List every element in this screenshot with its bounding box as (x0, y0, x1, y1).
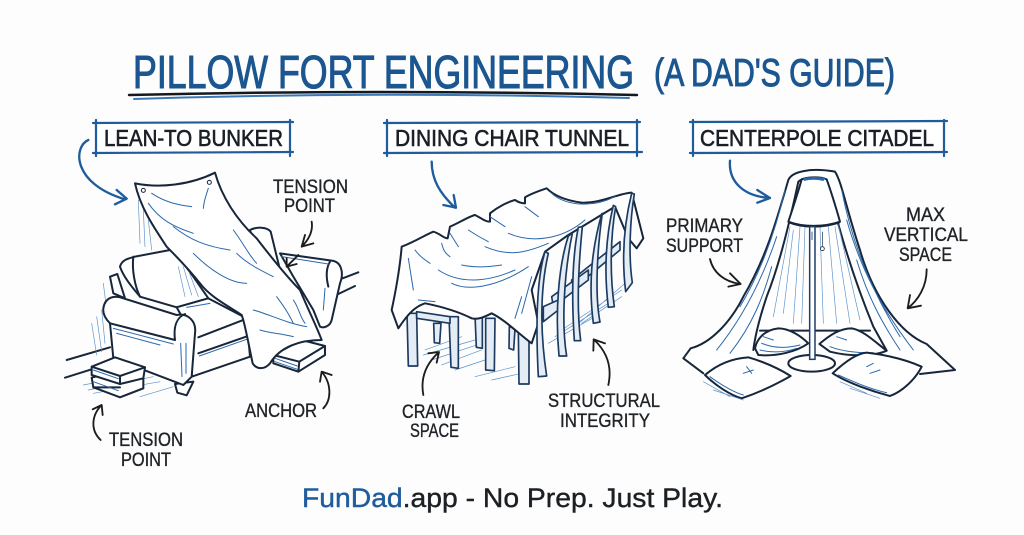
heading: dining chair tunnel (384, 120, 642, 156)
seat cushion (177, 298, 250, 377)
arrow: tension point bottom (93, 405, 103, 440)
arrow: anchor (320, 372, 332, 408)
label: primary support (666, 216, 743, 257)
label: max vertical space: SPACE (899, 245, 952, 266)
back cushion (120, 249, 208, 307)
heading: lean-to bunker (93, 120, 293, 156)
panel: dining chair tunnel (384, 120, 660, 442)
front arm (103, 297, 195, 385)
label: tension point top: TENSION (273, 177, 348, 198)
chair backs (537, 252, 548, 377)
chair rungs (572, 242, 620, 290)
label: tension point bottom: TENSION (109, 430, 183, 451)
arrow: heading to sheet (79, 140, 127, 204)
illustration: lamp with sheet and pillows (683, 161, 955, 400)
title: PILLOW FORT ENGINEERING (133, 46, 634, 98)
left books (92, 370, 143, 397)
label: crawl space: CRAWL (402, 402, 460, 423)
heading: centerpole citadel (690, 120, 947, 156)
title: (A DAD'S GUIDE) (654, 52, 895, 95)
lamp pole and base (788, 355, 835, 372)
right books (273, 340, 325, 372)
label: primary support: PRIMARY (666, 216, 743, 237)
heading: centerpole citadel: CENTERPOLE CITADEL (700, 125, 934, 151)
label: tension point top (273, 177, 348, 217)
label: max vertical space (884, 205, 968, 266)
foot (175, 382, 193, 395)
label: crawl space (402, 402, 460, 442)
far armrest (280, 253, 342, 327)
label: structural integrity: INTEGRITY (560, 411, 650, 432)
arrow: structural integrity (593, 339, 610, 385)
footer tagline: FunDad.app - No Prep. Just Play. (302, 483, 723, 513)
back pillows (755, 328, 808, 355)
panel: centerpole citadel (666, 120, 968, 400)
label: max vertical space: VERTICAL (884, 225, 968, 246)
front pillows (705, 357, 791, 398)
far legs (434, 323, 441, 343)
illustration: table with sheet and chairs (392, 162, 643, 395)
label: anchor: ANCHOR (245, 401, 317, 422)
arrow: crawl space (422, 352, 439, 395)
sheet (392, 188, 643, 343)
label: tension point top: POINT (284, 196, 335, 217)
label: primary support: SUPPORT (666, 236, 743, 257)
arrow: primary support (710, 259, 741, 287)
heading: dining chair tunnel: DINING CHAIR TUNNEL (395, 125, 629, 151)
label: max vertical space: MAX (906, 205, 945, 226)
arrow: heading to tunnel (432, 162, 456, 208)
label: structural integrity (548, 391, 660, 432)
heading: lean-to bunker: LEAN-TO BUNKER (104, 125, 283, 151)
label: tension point bottom: POINT (121, 450, 171, 471)
label: crawl space: SPACE (410, 421, 459, 442)
panel: lean-to bunker (65, 120, 358, 471)
lamp shade (788, 177, 840, 226)
arrow: heading to lamp (730, 161, 770, 203)
label: structural integrity: STRUCTURAL (548, 391, 660, 412)
illustration: sofa with sheet (65, 140, 358, 440)
arrow: max vertical space (908, 269, 927, 308)
label: tension point bottom (109, 430, 183, 471)
sheet (683, 170, 955, 374)
arrow: tension point top (287, 222, 313, 267)
sheet (135, 173, 322, 368)
